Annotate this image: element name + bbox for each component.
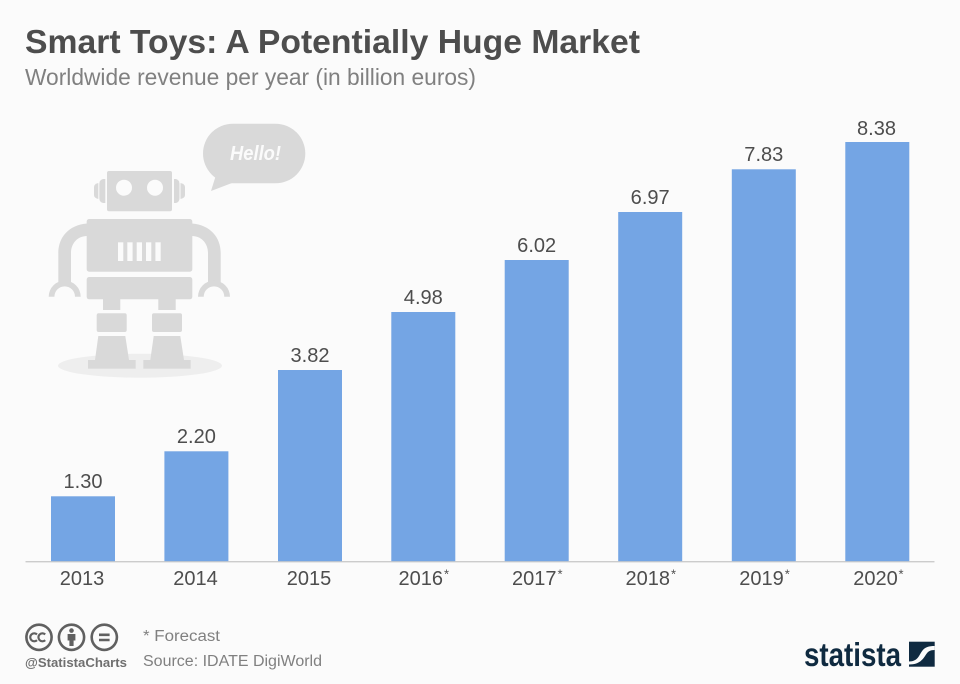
bar 2020: * — [898, 566, 904, 582]
bar 2020 — [845, 118, 909, 590]
bar 2019: 2019 — [739, 568, 784, 590]
bar 2019 — [732, 144, 796, 590]
bar 2017: * — [558, 566, 563, 582]
bar 2018: 2018 — [626, 568, 670, 590]
robot torso — [87, 219, 192, 272]
bar 2015 — [278, 345, 342, 590]
robot hips — [87, 277, 192, 299]
title: Smart Toys: A Potentially Huge Market — [25, 24, 640, 61]
icon: no derivatives — [92, 625, 117, 650]
robot arms — [49, 224, 230, 297]
icon: creative commons licence badges — [26, 625, 117, 650]
statista logo: statista — [804, 636, 902, 673]
bar 2018 — [618, 187, 682, 590]
bar 2013: 1.30 — [64, 471, 102, 493]
robot head — [94, 171, 185, 211]
bar 2015: 3.82 — [290, 345, 330, 367]
bar 2016: 4.98 — [404, 287, 443, 309]
icon: cc — [26, 625, 52, 650]
robot shadow — [58, 354, 222, 378]
icon: statista square — [909, 642, 935, 667]
bar 2014 — [164, 426, 228, 590]
bar 2018: * — [671, 566, 676, 582]
bar 2018: 6.97 — [631, 187, 670, 209]
bar 2016: 2016 — [398, 568, 443, 590]
bar 2014: 2.20 — [177, 426, 216, 448]
subtitle: Worldwide revenue per year (in billion euros) — [25, 64, 476, 90]
bar 2017: 6.02 — [517, 235, 556, 257]
icon: robot with speech bubble — [49, 124, 305, 378]
speech bubble: Hello! — [230, 143, 281, 165]
bar 2016: * — [444, 566, 449, 582]
icon: attribution — [59, 625, 84, 650]
speech bubble — [203, 124, 305, 191]
bar 2014: 2014 — [173, 568, 218, 590]
bar 2013 — [51, 471, 115, 590]
bar 2020: 8.38 — [857, 118, 896, 140]
bar 2019: * — [785, 566, 790, 582]
bar 2020: 2020 — [853, 568, 898, 590]
bar 2015: 2015 — [287, 568, 331, 590]
robot right leg — [143, 299, 191, 369]
bar 2013: 2013 — [60, 568, 104, 590]
bar 2017 — [505, 235, 569, 590]
bar chart — [26, 118, 934, 590]
bar 2019: 7.83 — [744, 144, 783, 166]
source note: Source: IDATE DigiWorld — [143, 653, 322, 670]
bar 2016 — [391, 287, 455, 590]
axis line — [26, 561, 934, 562]
forecast note: * Forecast — [143, 628, 221, 645]
robot left leg — [88, 299, 136, 369]
social handle: @StatistaCharts — [25, 655, 127, 670]
bar 2017: 2017 — [512, 568, 556, 590]
